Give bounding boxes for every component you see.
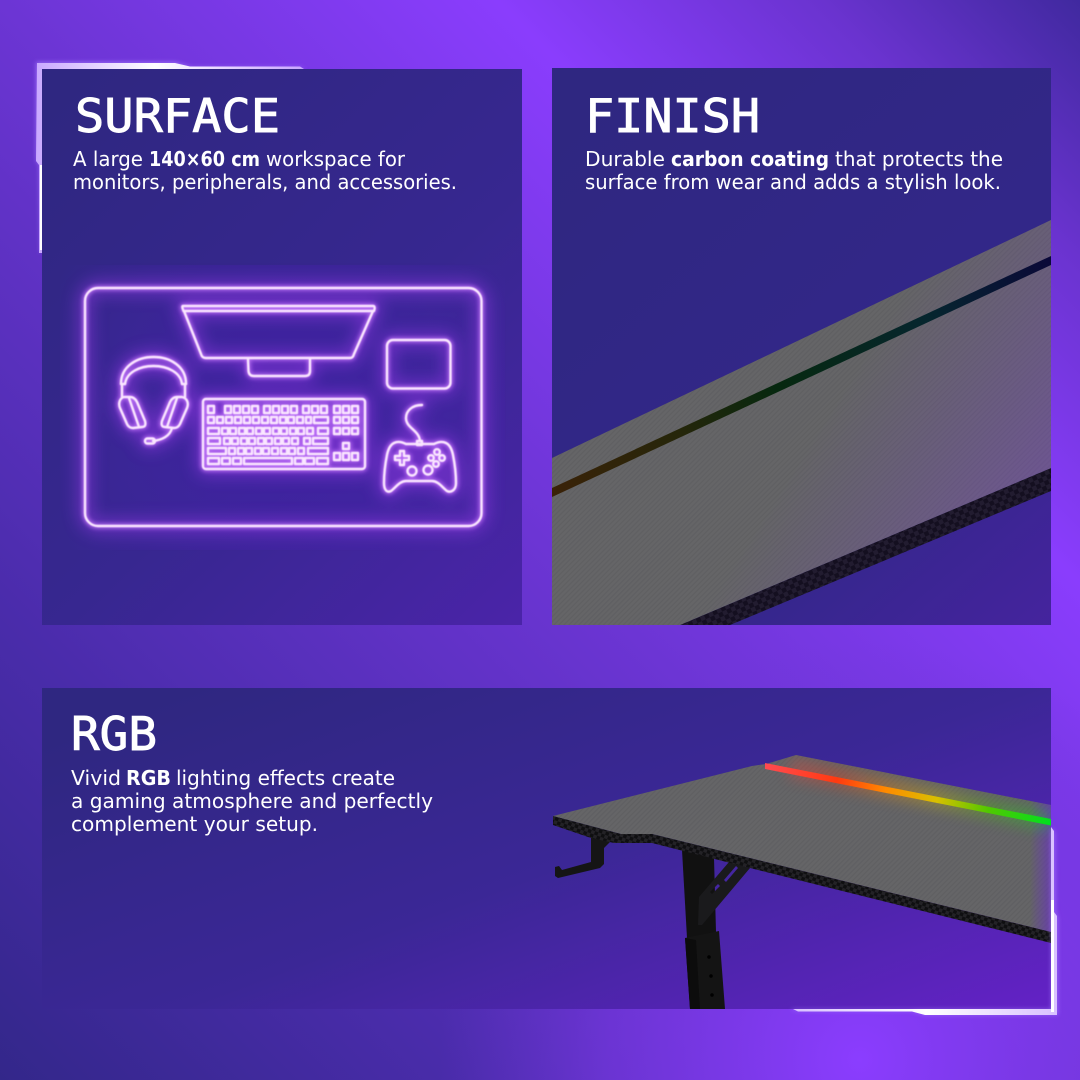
desk leg	[682, 850, 725, 1009]
text: rgb description: a gaming atmosphere and perfectly	[71, 789, 433, 813]
corner frame: top left	[36, 62, 306, 254]
text: surface description: workspace for	[266, 147, 406, 171]
text: finish description: Durable	[585, 147, 665, 171]
RGB groove	[552, 256, 1051, 497]
text: rgb description: RGB	[126, 766, 171, 790]
leg brace	[698, 862, 750, 925]
text: surface description: 140×60 cm	[149, 147, 260, 171]
text: finish description: surface from wear and adds a stylish look.	[585, 170, 1001, 194]
desk top surface	[552, 220, 1051, 625]
icon: neon desk layout with monitor, headset, keyboard, mouse pad and controller	[60, 265, 505, 550]
panel: rgb	[42, 688, 1051, 1009]
carbon edge	[680, 468, 1051, 625]
RGB light glow	[790, 768, 1051, 822]
panel: finish	[552, 68, 1051, 625]
desk front edge	[553, 816, 1051, 943]
panel background: rgb	[42, 688, 1051, 1009]
panel background: finish	[552, 68, 1051, 625]
image: gaming desk with RGB strip	[553, 755, 1051, 1009]
headphone hook	[555, 838, 614, 878]
text: rgb description: Vivid	[71, 766, 121, 790]
text: rgb description: complement your setup.	[71, 812, 318, 836]
text: rgb description: lighting effects create	[176, 766, 395, 790]
text: surface description	[73, 147, 457, 194]
panel background: surface	[42, 69, 522, 625]
heading: finish: FINISH	[585, 89, 760, 143]
panel: surface	[42, 69, 522, 625]
text: finish description: carbon coating	[671, 147, 829, 171]
RGB light strip	[765, 763, 1051, 826]
desk top surface	[553, 755, 1051, 932]
text: finish description	[585, 147, 1003, 194]
text: finish description: that protects the	[835, 147, 1003, 171]
image: carbon desk surface close-up	[552, 220, 1051, 625]
corner frame: bottom right	[790, 827, 1058, 1015]
text: surface description: monitors, peripherals, and accessories.	[73, 170, 457, 194]
text: rgb description	[71, 766, 433, 836]
heading: rgb: RGB	[71, 707, 157, 761]
text: surface description: A large	[73, 147, 143, 171]
heading: surface: SURFACE	[75, 89, 280, 143]
